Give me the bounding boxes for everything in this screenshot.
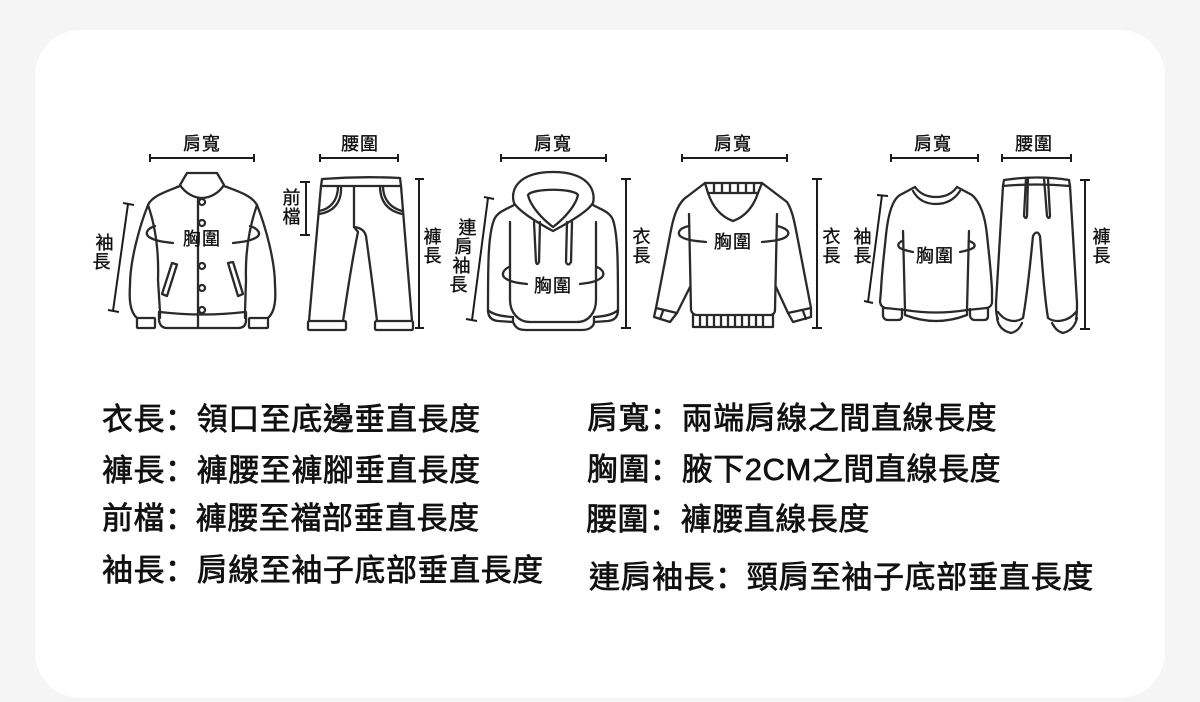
hoodie shoulder width: 肩寬	[534, 134, 572, 154]
joggers length: 褲	[1092, 227, 1112, 247]
definition: raglan sleeve length: 連肩袖長	[589, 560, 715, 595]
sweatshirt sleeve length: 袖	[854, 227, 872, 247]
trousers front rise	[282, 182, 310, 235]
trousers length: 長	[424, 246, 442, 266]
sweater outline	[654, 183, 811, 327]
definition: chest: ：	[642, 454, 674, 489]
definition: front rise: ：	[157, 503, 189, 538]
measurement definitions: left column	[102, 402, 544, 590]
definition: shoulder width: 肩寬	[587, 401, 650, 436]
trousers waist	[320, 134, 398, 162]
definition: trouser length: 褲腰至褲腳垂直長度	[197, 453, 481, 488]
sweatshirt chest label: 胸圍	[916, 246, 954, 266]
jacket sleeve length	[92, 203, 134, 312]
garment: V-neck sweater with measurements	[654, 134, 842, 328]
trousers length: 褲	[424, 227, 442, 247]
garment: trousers with measurements	[282, 134, 442, 330]
definition: shoulder width: ：	[642, 403, 674, 438]
hoodie shoulder width	[501, 134, 606, 162]
trousers outline	[308, 177, 413, 330]
definition: front rise: 褲腰至襠部垂直長度	[196, 501, 480, 536]
hoodie raglan sleeve length: 連	[458, 218, 478, 238]
garment: hoodie with measurements	[450, 134, 652, 330]
sweatshirt sleeve length	[854, 195, 888, 303]
hoodie raglan sleeve length: 長	[450, 275, 468, 295]
garment: crew sweatshirt with measurements	[854, 134, 992, 321]
sweater length	[812, 179, 842, 328]
jacket shoulder width	[150, 134, 254, 162]
sweater length: 長	[822, 246, 842, 266]
jacket sleeve length: 袖	[96, 233, 114, 253]
hoodie raglan sleeve length: 肩	[454, 237, 474, 257]
jacket sleeve length: 長	[92, 252, 112, 272]
definition: trouser length: 褲長	[102, 453, 165, 488]
definition: front rise: 前檔	[102, 501, 165, 536]
sweatshirt shoulder width	[891, 134, 978, 162]
definition: raglan sleeve length: 頸肩至袖子底部垂直長度	[747, 560, 1094, 595]
measurement definitions: right column	[586, 401, 1094, 597]
sweatshirt outline	[880, 187, 992, 321]
jacket chest label: 胸圍	[183, 229, 221, 249]
joggers length	[1080, 180, 1112, 329]
sweatshirt shoulder width: 肩寬	[914, 134, 952, 154]
sweater shoulder width	[682, 134, 787, 162]
definition: shoulder width: 兩端肩線之間直線長度	[682, 401, 997, 436]
joggers outline	[996, 178, 1077, 333]
definition: garment length: 領口至底邊垂直長度	[197, 402, 481, 437]
definition: sleeve length: ：	[157, 555, 189, 590]
definition: sleeve length: 袖長	[102, 553, 165, 588]
definition: sleeve length: 肩線至袖子底部垂直長度	[197, 553, 544, 588]
joggers length: 長	[1092, 246, 1112, 266]
definition: chest: 腋下2CM之間直線長度	[682, 452, 1001, 487]
sweater length: 衣	[822, 227, 842, 247]
definition: chest: 胸圍	[587, 452, 650, 487]
sweatshirt sleeve length: 長	[854, 246, 872, 266]
trousers front rise: 檔	[282, 207, 302, 227]
garment: baseball jacket with measurements	[92, 134, 275, 328]
definition: trouser length: ：	[157, 455, 189, 490]
sweater shoulder width: 肩寬	[714, 134, 752, 154]
definition: raglan sleeve length: ：	[707, 562, 739, 597]
jacket shoulder width: 肩寬	[183, 134, 221, 154]
garment: jogger pants with measurements	[996, 134, 1112, 333]
definition: waist: 褲腰直線長度	[681, 502, 870, 537]
hoodie raglan sleeve length: 袖	[452, 256, 472, 276]
hoodie length: 衣	[632, 227, 652, 247]
hoodie raglan sleeve length	[450, 197, 494, 321]
hoodie length: 長	[632, 246, 652, 266]
hoodie outline	[488, 172, 618, 330]
sweater chest label: 胸圍	[714, 232, 752, 252]
definition: garment length: ：	[157, 404, 189, 439]
trousers front rise: 前	[282, 188, 302, 208]
hoodie length	[621, 179, 652, 328]
joggers waist	[1002, 134, 1071, 162]
trousers waist: 腰圍	[341, 134, 379, 154]
jacket outline	[130, 173, 275, 328]
definition: waist: 腰圍	[586, 502, 649, 537]
joggers waist: 腰圍	[1015, 134, 1053, 154]
definition: garment length: 衣長	[102, 402, 165, 437]
trousers length	[415, 179, 442, 328]
definition: waist: ：	[641, 504, 673, 539]
hoodie chest label: 胸圍	[534, 276, 572, 296]
